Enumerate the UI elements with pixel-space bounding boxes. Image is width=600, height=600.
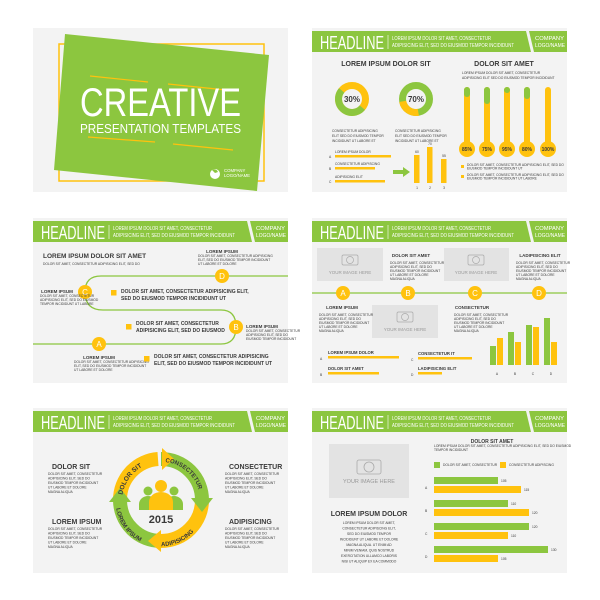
- header: LOREM IPSUM DOLOR SIT AMET, CONSECTETUR: [113, 226, 212, 232]
- slide 5: cycle: DOLOR SIT AMET, CONSECTETUR: [225, 472, 280, 476]
- markers: [78, 269, 243, 351]
- slide 3: winding timeline: DOLOR SIT AMET, CONSECTETUR ADIPISICING ELIT, SED DO: [43, 262, 140, 266]
- slide 1: cover: [33, 28, 288, 192]
- header: COMPANY: [256, 416, 285, 422]
- slide 6: bar comparison: LOREM IPSUM DOLOR SIT AMET, CONSECTETUR ADIPISICING ELIT, SED DO EIUSMOD: [434, 444, 572, 448]
- text block: SED DO EIUSMOD TEMPOR: [347, 532, 392, 536]
- image placeholder: [329, 444, 409, 498]
- slide 4: image timeline: ADIPISICING ELIT, SED DO: [319, 317, 361, 321]
- labels: LOREM IPSUM: [206, 249, 238, 254]
- header: [312, 411, 567, 433]
- slide 4: image timeline: LADIPISICING ELIT: [519, 253, 561, 258]
- slide 4: image timeline: UT LABORE ET DOLORE: [516, 273, 555, 277]
- slide 5: cycle: UT LABORE ET DOLORE: [225, 486, 264, 490]
- bullets: DOLOR SIT AMET, CONSECTETUR ADIPISICING: [154, 354, 269, 360]
- markers: C: [82, 288, 88, 297]
- slide 4: image timeline: [312, 218, 571, 383]
- header: ADIPISICING ELIT, SED DO EIUSMOD TEMPOR INCIDIDUNT: [392, 233, 514, 239]
- path: [33, 276, 288, 344]
- heading left: LOREM IPSUM DOLOR SIT: [341, 61, 431, 68]
- slide 2: donuts and thermometers: INCIDIDUNT UT LABORE ET: [332, 139, 376, 143]
- horizontal bars: B: [329, 167, 332, 171]
- bar chart: [490, 318, 557, 376]
- markers: A: [96, 340, 102, 349]
- text blocks: [390, 253, 445, 281]
- horizontal bars: LOREM IPSUM DOLOR: [335, 150, 371, 154]
- bar list: LOREM IPSUM DOLOR: [328, 350, 374, 355]
- slide 4: image timeline: EIUSMOD TEMPOR INCIDIDUNT: [319, 321, 369, 325]
- text blocks: MAGNA ALIQUA: [390, 277, 416, 281]
- text block: INCIDIDUNT UT LABORE ET DOLORE: [340, 538, 399, 542]
- slide 4: image timeline: DOLOR SIT AMET, CONSECTETUR: [454, 313, 509, 317]
- slide 3: winding timeline: [33, 218, 301, 383]
- header: LOREM IPSUM DOLOR SIT AMET, CONSECTETUR: [392, 36, 491, 42]
- slide 3: winding timeline: ADIPISICING ELIT, SED DO: [246, 333, 288, 337]
- markers: B: [233, 323, 239, 332]
- labels: [198, 249, 273, 266]
- header: ADIPISICING ELIT, SED DO EIUSMOD TEMPOR INCIDIDUNT: [392, 43, 514, 49]
- header: [33, 411, 288, 433]
- thermometers: 75%: [482, 147, 493, 153]
- slide 5: cycle: MAGNA ALIQUA: [48, 545, 74, 549]
- slide 5: cycle: UT LABORE ET DOLORE: [48, 540, 87, 544]
- text blocks: UT LABORE ET DOLORE: [390, 273, 429, 277]
- title: CREATIVE: [80, 81, 241, 125]
- horizontal bar chart: A: [425, 486, 428, 490]
- donut captions: CONSECTETUR ADIPISICING: [332, 129, 378, 133]
- slide 2: donuts and thermometers: LOREM IPSUM DOLOR SIT AMET, CONSECTETUR: [462, 71, 541, 75]
- text block: CONSECTETUR ADIPISCING ELIT,: [342, 526, 396, 530]
- vertical bars: 3: [443, 186, 445, 190]
- slide 2: donuts and thermometers: CONSECTETUR ADIPISICING: [395, 129, 441, 133]
- slide 4: image timeline: DOLOR SIT AMET, CONSECTETUR: [516, 261, 571, 265]
- header: LOGO/NAME: [256, 233, 286, 239]
- slide 4: image timeline: UT LABORE ET DOLORE: [454, 325, 493, 329]
- slide 4: image timeline: C: [472, 289, 478, 298]
- slide 4: image timeline: EIUSMOD TEMPOR INCIDIDUNT: [454, 321, 504, 325]
- slide 2: donuts and thermometers: INCIDIDUNT UT LABORE ET: [395, 139, 439, 143]
- slide 4: image timeline: A: [340, 289, 346, 298]
- header: HEADLINE: [41, 223, 105, 243]
- slide 4: image timeline: MAGNA ALIQUA: [454, 329, 480, 333]
- text blocks: UT LABORE ET DOLORE: [48, 486, 87, 490]
- company logo: COMPANY: [224, 168, 246, 173]
- header: LOREM IPSUM DOLOR SIT AMET, CONSECTETUR: [392, 226, 491, 232]
- slide 3: winding timeline: TEMPOR INCIDIDUNT UT LABORE: [40, 302, 94, 306]
- image placeholders: [317, 248, 383, 281]
- header: LOGO/NAME: [535, 43, 565, 49]
- horizontal bar chart: 105: [501, 479, 507, 483]
- legend: [434, 462, 554, 468]
- horizontal bar chart: [425, 477, 557, 562]
- bar chart: B: [514, 372, 517, 376]
- donut 70%: [402, 86, 430, 115]
- slide 4: image timeline: YOUR IMAGE HERE: [384, 327, 426, 332]
- header: LOREM IPSUM DOLOR SIT AMET, CONSECTETUR: [113, 416, 212, 422]
- slide 5: cycle: MAGNA ALIQUA: [225, 545, 251, 549]
- header: COMPANY: [535, 416, 564, 422]
- vertical bars: 55: [442, 154, 446, 158]
- slide 5: cycle: LOREM IPSUM: [52, 519, 102, 526]
- bar list: A: [320, 357, 323, 361]
- header: COMPANY: [535, 36, 564, 42]
- slide 4: image timeline: DOLOR SIT AMET, CONSECTETUR: [319, 313, 374, 317]
- header: ADIPISICING ELIT, SED DO EIUSMOD TEMPOR INCIDIDUNT: [392, 423, 514, 429]
- slide 4: image timeline: ADIPISICING ELIT, SED DO: [454, 317, 496, 321]
- horizontal bars: A: [329, 155, 332, 159]
- slide 4: image timeline: B: [405, 289, 411, 298]
- bar list: [320, 350, 472, 377]
- text blocks: [48, 464, 103, 494]
- horizontal bars: C: [329, 180, 332, 184]
- header: HEADLINE: [320, 33, 384, 53]
- horizontal bar chart: D: [425, 555, 428, 559]
- image placeholder: YOUR IMAGE HERE: [343, 479, 395, 485]
- horizontal bar chart: 120: [532, 525, 538, 529]
- horizontal bar chart: B: [425, 509, 428, 513]
- thermometers: 95%: [502, 147, 513, 153]
- text block: LOREM IPSUM DOLOR SIT AMET,: [343, 521, 395, 525]
- slide 5: cycle: ADIPISICING: [229, 519, 272, 526]
- slide 3: winding timeline: LOREM IPSUM: [83, 355, 115, 360]
- bullets: DOLOR SIT AMET, CONSECTETUR: [136, 321, 219, 327]
- slide 4: image timeline: D: [536, 289, 542, 298]
- text blocks: DOLOR SIT: [52, 464, 91, 471]
- slide 3: winding timeline: DOLOR SIT AMET, CONSECTETUR ADIPISICING: [74, 360, 149, 364]
- legend: DOLOR SIT AMET, CONSECTETUR: [443, 463, 498, 467]
- text blocks: DOLOR SIT AMET, CONSECTETUR: [48, 472, 103, 476]
- slide 5: cycle: MAGNA ALIQUA: [225, 490, 251, 494]
- header: ADIPISICING ELIT, SED DO EIUSMOD TEMPOR INCIDIDUNT: [113, 233, 235, 239]
- header: COMPANY: [535, 226, 564, 232]
- slide 6: bar comparison: TEMPOR INCIDIDUNT: [434, 448, 468, 452]
- horizontal bar chart: 105: [501, 557, 507, 561]
- text block: NISI UT ALIQUIP EX EA COMMODO: [342, 560, 397, 564]
- slide 4: image timeline: MAGNA ALIQUA: [319, 329, 345, 333]
- slide 3: winding timeline: UT LABORE ET DOLORE: [74, 368, 113, 372]
- bar chart: A: [496, 372, 499, 376]
- slide 5: cycle: ADIPISICING ELIT, SED DO: [225, 532, 267, 536]
- heading right: DOLOR SIT AMET: [474, 61, 535, 68]
- header: HEADLINE: [320, 223, 384, 243]
- slide 3: winding timeline: LOREM IPSUM: [246, 324, 278, 329]
- thermometers: 80%: [522, 147, 533, 153]
- company logo: LOGO/NAME: [224, 173, 250, 178]
- cycle diagram: DOLOR SIT: [118, 462, 141, 494]
- header: [312, 31, 567, 53]
- labels: ELIT, SED DO EIUSMOD TEMPOR INCIDIDUNT: [198, 258, 270, 262]
- slide 3: winding timeline: DOLOR SIT AMET, CONSECTETUR: [40, 294, 95, 298]
- chart title: DOLOR SIT AMET: [471, 439, 513, 445]
- horizontal bar chart: 130: [551, 548, 557, 552]
- donut 30%: 30%: [344, 95, 360, 104]
- horizontal bars: CONSECTETUR ADIPISCING: [335, 162, 380, 166]
- timeline: [312, 292, 567, 294]
- thermometers: [459, 87, 556, 157]
- bar list: CONSECTETUR IT: [418, 351, 455, 356]
- bar list: C: [411, 358, 414, 362]
- bullets: DOLOR SIT AMET, CONSECTETUR ADIPISICING ELIT,: [121, 289, 249, 295]
- slide 4: image timeline: LOREM IPSUM: [326, 305, 358, 310]
- cycle diagram: [109, 448, 213, 552]
- text blocks: EIUSMOD TEMPOR INCIDIDUNT: [48, 481, 98, 485]
- slide 2: donuts and thermometers: [312, 28, 567, 192]
- slide 5: cycle: ADIPISICING ELIT, SED DO: [225, 476, 267, 480]
- legend: DOLOR SIT AMET, CONSECTETUR ADIPISICING ELIT, SED DO: [467, 163, 564, 167]
- header: HEADLINE: [320, 413, 384, 433]
- markers: D: [219, 272, 225, 281]
- text blocks: MAGNA ALIQUA: [48, 490, 74, 494]
- header: LOGO/NAME: [256, 423, 286, 429]
- donut 70%: 70%: [408, 95, 424, 104]
- bar list: LADIPISICING ELIT: [418, 366, 457, 371]
- header: LOGO/NAME: [535, 233, 565, 239]
- text block: [331, 511, 407, 564]
- slide 2: donuts and thermometers: ELIT SED DO EIUSMOD TEMPOR: [395, 134, 447, 138]
- slide 3: winding timeline: LOREM IPSUM: [41, 289, 73, 294]
- legend: EIUSMOD TEMPOR INCIDIDUNT UT LABORE: [467, 176, 538, 180]
- slide 4: image timeline: ADIPISICING ELIT, SED DO: [516, 265, 558, 269]
- slide 2: donuts and thermometers: ADIPISICING ELIT SED DO EIUSMOD TEMPOR INCIDIDUNT: [462, 76, 555, 80]
- bullets: [111, 289, 272, 367]
- text block: MAGNA ALIQUA. UT ENIM AD: [346, 543, 392, 547]
- cycle diagram: 2015: [149, 514, 173, 526]
- text block: MINIM VENIAM, QUIS NOSTRUD: [344, 548, 395, 552]
- slide 3: winding timeline: DOLOR SIT AMET, CONSECTETUR: [246, 329, 301, 333]
- header: LOGO/NAME: [535, 423, 565, 429]
- vertical bars: 1: [416, 186, 418, 190]
- text blocks: DOLOR SIT AMET, CONSECTETUR: [390, 261, 445, 265]
- donut 30%: [333, 86, 366, 118]
- slide 5: cycle: DOLOR SIT AMET, CONSECTETUR: [48, 527, 103, 531]
- subtitle: PRESENTATION TEMPLATES: [80, 121, 241, 136]
- bar chart: D: [550, 372, 553, 376]
- header: ADIPISICING ELIT, SED DO EIUSMOD TEMPOR INCIDIDUNT: [113, 423, 235, 429]
- header: COMPANY: [256, 226, 285, 232]
- text blocks: EIUSMOD TEMPOR INCIDIDUNT: [390, 269, 440, 273]
- header: HEADLINE: [41, 413, 105, 433]
- slide 4: image timeline: CONSECTETUR: [455, 305, 490, 310]
- labels: UT LABORE ET DOLORE: [198, 262, 237, 266]
- slide 5: cycle: EIUSMOD TEMPOR INCIDIDUNT: [225, 536, 275, 540]
- cycle diagram: LOREM IPSUM: [116, 508, 142, 542]
- legend: [461, 163, 564, 180]
- horizontal bars: ADIPISICING ELIT: [335, 175, 363, 179]
- icon: people: [139, 480, 183, 510]
- vertical bars: 60: [415, 150, 419, 154]
- slide 3: winding timeline: ADIPISICING ELIT, SED DO EIUSMOD: [40, 298, 99, 302]
- slide 6: bar comparison: [312, 408, 572, 573]
- slide 3: winding timeline: EIUSMOD TEMPOR INCIDIDUNT: [246, 337, 296, 341]
- text blocks: DOLOR SIT AMET: [392, 253, 430, 258]
- yellow frame: [59, 44, 264, 181]
- header: [312, 221, 567, 243]
- horizontal bar chart: 110: [511, 534, 516, 538]
- slide 5: cycle: UT LABORE ET DOLORE: [225, 540, 264, 544]
- vertical bars: 70: [428, 142, 432, 146]
- thermometers: 100%: [542, 147, 555, 153]
- bar chart: C: [532, 372, 535, 376]
- thermometers: 85%: [462, 147, 473, 153]
- horizontal bar chart: 115: [524, 488, 529, 492]
- slide 5: cycle: ADIPISICING ELIT, SED DO: [48, 532, 90, 536]
- green tilted card: [54, 34, 269, 191]
- slide 5: cycle: [33, 408, 288, 573]
- header: LOREM IPSUM DOLOR SIT AMET, CONSECTETUR: [392, 416, 491, 422]
- title text: LOREM IPSUM DOLOR SIT AMET: [43, 253, 146, 260]
- slide 4: image timeline: EIUSMOD TEMPOR INCIDIDUNT: [516, 269, 566, 273]
- bar list: DOLOR SIT AMET: [328, 366, 364, 371]
- slide 5: cycle: CONSECTETUR: [229, 464, 282, 471]
- slide 5: cycle: EIUSMOD TEMPOR INCIDIDUNT: [48, 536, 98, 540]
- slide 4: image timeline: YOUR IMAGE HERE: [455, 270, 497, 275]
- slide 5: cycle: EIUSMOD TEMPOR INCIDIDUNT: [225, 481, 275, 485]
- horizontal bar chart: 120: [532, 511, 538, 515]
- labels: DOLOR SIT AMET, CONSECTETUR ADIPISICING: [198, 254, 273, 258]
- slide 4: image timeline: MAGNA ALIQUA: [516, 277, 542, 281]
- slide 3: winding timeline: ELIT, SED DO EIUSMOD TEMPOR INCIDIDUNT: [74, 364, 146, 368]
- slide 5: cycle: DOLOR SIT AMET, CONSECTETUR: [225, 527, 280, 531]
- legend: DOLOR SIT AMET, CONSECTETUR ADIPISICING ELIT, SED DO: [467, 173, 564, 177]
- horizontal bar chart: 110: [511, 502, 516, 506]
- bullets: ADIPISICING ELIT, SED DO EIUSMOD: [136, 328, 225, 334]
- bar list: B: [320, 373, 323, 377]
- legend: EIUSMOD TEMPOR INCIDIDUNT UT: [467, 166, 523, 170]
- bullets: SED DO EIUSMOD TEMPOR INCIDIDUNT UT: [121, 296, 226, 302]
- text blocks: ADIPISICING ELIT, SED DO: [48, 476, 90, 480]
- header: [33, 221, 288, 243]
- cycle diagram: CONSECTETUR: [166, 458, 202, 490]
- horizontal bar chart: C: [425, 532, 428, 536]
- arrow: [393, 167, 410, 177]
- text block: EXERCITATION ULLAMCO LABORIS: [341, 554, 398, 558]
- slide 4: image timeline: UT LABORE ET DOLORE: [319, 325, 358, 329]
- text blocks: ADIPISICING ELIT, SED DO: [390, 265, 432, 269]
- vertical bars: 2: [429, 186, 431, 190]
- bar list: D: [411, 373, 414, 377]
- horizontal bars: [329, 150, 391, 184]
- legend: CONSECTETUR ADIPISCING: [509, 463, 554, 467]
- bullets: ELIT, SED DO EIUSMOD TEMPOR INCIDIDUNT UT: [154, 361, 272, 367]
- text block: LOREM IPSUM DOLOR: [331, 511, 407, 518]
- cycle diagram: ADIPISICING: [161, 530, 194, 546]
- slide 2: donuts and thermometers: ELIT SED DO EIUSMOD TEMPOR: [332, 134, 384, 138]
- vertical bars: [414, 142, 446, 190]
- image placeholders: YOUR IMAGE HERE: [329, 270, 371, 275]
- company logo: [210, 168, 250, 179]
